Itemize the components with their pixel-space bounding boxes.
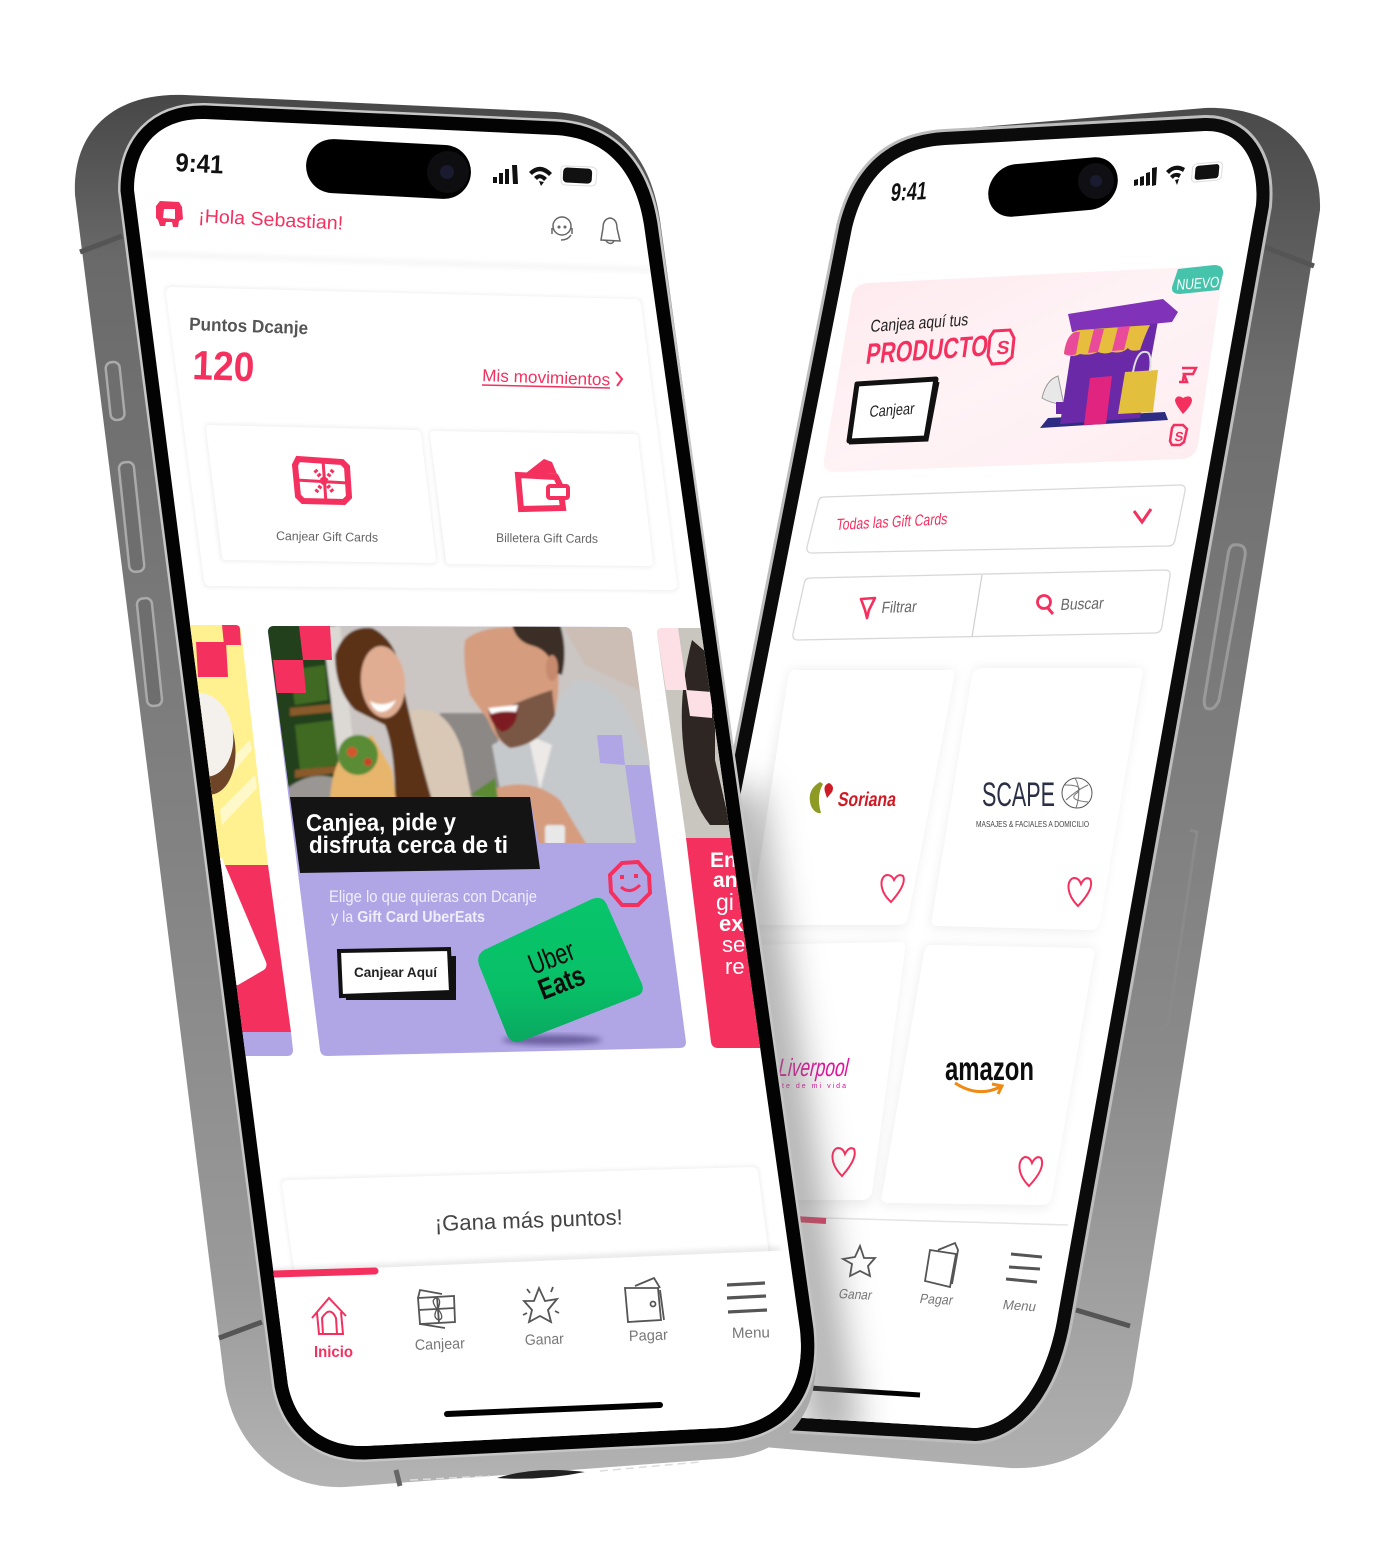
banner heading: PRODUCTO <box>864 329 990 371</box>
partial text: ex <box>719 911 744 936</box>
right bottom navigation <box>790 1217 1070 1430</box>
sub-card: canjear gift cards <box>206 425 436 563</box>
nav icon: wallet <box>925 1243 958 1287</box>
filter and search bar <box>793 570 1170 640</box>
header <box>156 201 620 244</box>
greeting: ¡Hola Sebastian! <box>198 206 344 235</box>
soriana logo: Soriana <box>836 789 899 811</box>
icon: bell <box>601 218 620 244</box>
nuevo tag: NUEVO <box>1176 274 1220 294</box>
left phone metal body <box>75 95 816 1487</box>
black title box: Canjea, pide y <box>306 809 457 837</box>
brand card: liverpool <box>763 942 904 1200</box>
yellow panel <box>150 625 268 865</box>
icon: support headset <box>552 217 572 240</box>
left phone <box>75 95 816 1487</box>
points panel <box>166 287 677 590</box>
brand logo <box>156 201 183 227</box>
right partial banner <box>657 628 800 1048</box>
photo <box>657 628 800 838</box>
red panel <box>150 865 291 1032</box>
right status time: 9:41 <box>889 177 929 207</box>
panel label: Puntos Dcanje <box>189 314 308 338</box>
store illustration <box>1040 299 1178 428</box>
active tab indicator <box>795 1219 826 1221</box>
canjear button <box>849 379 938 443</box>
partial text: re <box>725 954 745 979</box>
coin icon: S <box>995 338 1011 359</box>
lilac strip <box>150 1032 293 1056</box>
brand card: soriana <box>750 670 954 925</box>
uber eats card <box>478 898 643 1042</box>
left dynamic island <box>305 138 472 200</box>
nav icon: menu <box>1006 1254 1042 1282</box>
header shadow <box>145 254 655 270</box>
banner small icons <box>1170 368 1196 445</box>
canjear aqui button <box>339 949 456 1000</box>
nav icon: star <box>523 1287 559 1322</box>
right home indicator <box>810 1388 920 1395</box>
right phone screen <box>700 131 1257 1428</box>
nav icon: home <box>312 1298 346 1334</box>
gift card label: Canjear Gift Cards <box>276 529 378 545</box>
movements link: Mis movimientos <box>482 366 610 389</box>
scape logo <box>976 776 1092 829</box>
yellow stripes <box>215 740 257 825</box>
icon: smile <box>610 862 650 905</box>
nav label: menu: Menu <box>732 1324 770 1342</box>
heart icon <box>1068 878 1091 906</box>
nav label: inicio: Inicio <box>314 1344 353 1361</box>
lilac square <box>597 735 625 765</box>
left status time: 9:41 <box>175 147 224 180</box>
left phone bottom ports <box>410 1462 700 1480</box>
left phone screen <box>134 119 801 1446</box>
card: gana mas puntos: ¡Gana más puntos! <box>434 1204 623 1236</box>
panel card <box>166 287 677 590</box>
banner description <box>329 887 537 926</box>
left phone antenna bands <box>80 236 400 1486</box>
right dynamic island <box>987 155 1119 219</box>
soriana logo <box>810 782 899 813</box>
partial text: an <box>713 869 738 892</box>
banner background <box>824 266 1222 472</box>
banner: canjea productos <box>824 265 1223 472</box>
nav shadow <box>270 1250 780 1272</box>
dropdown: todas las gift cards <box>807 485 1185 553</box>
right phone metal body <box>700 108 1320 1468</box>
pink squares <box>657 628 712 718</box>
sub-card shadow <box>206 425 653 566</box>
points number: 120 <box>192 342 255 390</box>
main banner: ubereats <box>260 620 686 1056</box>
heart icon <box>881 875 904 902</box>
active tab indicator <box>274 1271 375 1274</box>
nav icon: menu <box>727 1283 767 1312</box>
right phone screen content <box>720 155 1223 1440</box>
wallet label: Billetera Gift Cards <box>496 531 598 546</box>
partial text: gi <box>716 889 734 915</box>
nav label: canjear: Canjear <box>415 1335 465 1354</box>
panel shadow <box>166 287 677 590</box>
sub-card: billetera gift cards <box>430 431 653 566</box>
woman hair <box>682 640 730 825</box>
nav label: pagar: Pagar <box>918 1291 955 1308</box>
coconut <box>167 689 242 799</box>
partial text <box>710 849 745 979</box>
uber eats card: Uber <box>524 935 580 982</box>
photo <box>260 620 660 860</box>
brand card: amazon <box>882 945 1094 1205</box>
red squares <box>273 626 332 693</box>
lilac background <box>268 626 686 1056</box>
nav label: ganar: Ganar <box>837 1286 874 1303</box>
liverpool logo <box>780 1058 850 1088</box>
nav label: pagar: Pagar <box>629 1327 668 1345</box>
brand card shadows <box>754 668 1131 1208</box>
banner small icons: S <box>1173 429 1185 444</box>
left phone side buttons <box>105 361 163 707</box>
filter and search bar: Buscar <box>1059 595 1105 614</box>
right phone antenna bands <box>1076 246 1314 1326</box>
shadow cast by left phone <box>735 790 835 1440</box>
nuevo tag <box>1172 265 1223 294</box>
icon: gift card <box>295 459 349 503</box>
left bottom navigation <box>270 1250 815 1460</box>
banner heading small: Canjea aquí tus <box>870 309 969 336</box>
brand card: scape <box>932 668 1142 930</box>
icon: wallet <box>518 459 568 509</box>
amazon logo: amazon <box>945 1050 1034 1087</box>
nav icon: gift <box>418 1290 455 1328</box>
red panel <box>686 838 800 1048</box>
uber eats card: Eats <box>534 960 589 1007</box>
heart icon <box>1019 1157 1042 1186</box>
nav panel <box>270 1251 815 1460</box>
nav icon: wallet <box>625 1278 664 1322</box>
left home indicator <box>447 1405 660 1414</box>
right status icons <box>1134 162 1223 186</box>
banner description: y la Gift Card UberEats <box>331 909 485 926</box>
left status icons <box>493 165 597 186</box>
right phone highlight rim <box>700 131 1257 1428</box>
liverpool logo: te de mi vida <box>782 1083 846 1090</box>
left partial banner <box>150 625 293 1056</box>
card: gana mas puntos <box>282 1167 775 1310</box>
banner description: Elige lo que quieras con Dcanje <box>329 887 537 906</box>
right phone <box>700 108 1320 1468</box>
scape logo: SCAPE <box>982 776 1055 814</box>
nav icon: star <box>843 1246 875 1276</box>
coin icon <box>988 330 1014 364</box>
nav label: menu: Menu <box>1001 1297 1038 1314</box>
black title box: disfruta cerca de ti <box>309 832 508 859</box>
left phone screen content <box>145 138 815 1460</box>
filter and search bar: Filtrar <box>880 598 918 617</box>
heart icon <box>832 1148 855 1176</box>
red squares <box>196 625 241 677</box>
right phone side buttons <box>1160 545 1245 1030</box>
left phone bezel <box>134 119 801 1446</box>
dropdown: todas las gift cards: Todas las Gift Cards <box>836 510 949 534</box>
canjear aqui button: Canjear Aquí <box>354 964 438 980</box>
white card <box>150 858 266 1000</box>
scape logo: MASAJES & FACIALES A DOMICILIO <box>976 820 1089 829</box>
canjear button: Canjear <box>869 400 916 421</box>
card shadow <box>502 1035 602 1045</box>
black title box <box>290 797 540 873</box>
left phone highlight rim <box>134 119 801 1446</box>
partial text: se <box>722 932 745 957</box>
partial text: En <box>710 849 737 872</box>
amazon logo <box>946 1062 1032 1095</box>
nav label: ganar: Ganar <box>525 1331 564 1349</box>
liverpool logo: Liverpool <box>776 1054 852 1082</box>
right phone bezel <box>700 131 1257 1428</box>
